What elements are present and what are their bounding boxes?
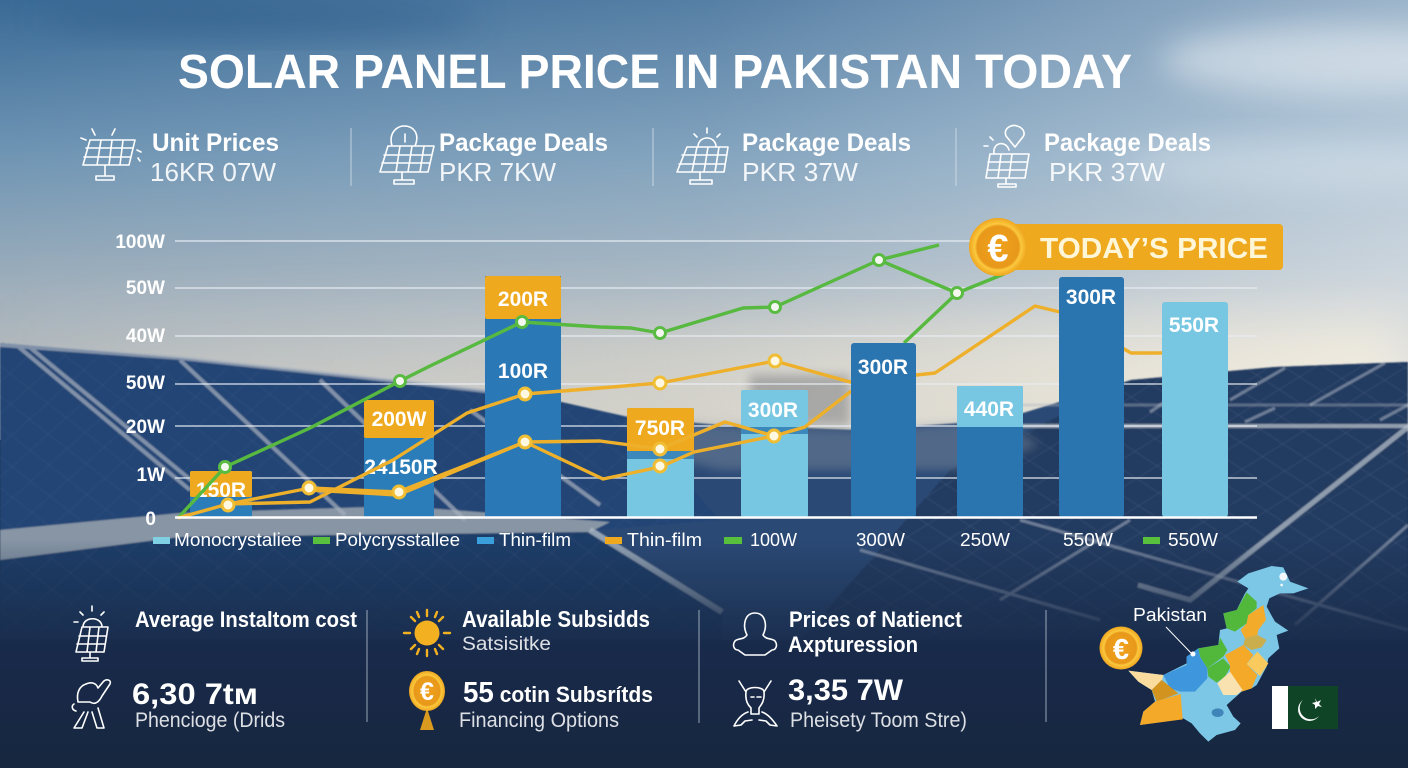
panel: national prices: Axpturession <box>788 632 918 657</box>
stat: package deals 7KW: Package Deals <box>439 129 608 157</box>
bar: 300R tall: 300R <box>1066 286 1116 309</box>
bar: 300R light <box>741 390 808 517</box>
panel: national prices: Prices of Natienct <box>789 607 963 632</box>
legend: Thin-film <box>499 530 571 550</box>
bar: 550R <box>1162 302 1228 517</box>
icon: euro coin: € <box>1113 634 1129 666</box>
bar: 300R tall <box>1059 277 1124 517</box>
bar: 150R <box>190 471 252 517</box>
line: amber series <box>178 306 1165 518</box>
y axis labels: 50W <box>126 373 165 394</box>
legend <box>153 530 1218 550</box>
icon: wrench worker <box>72 680 110 728</box>
icon: solar panel with pin <box>984 125 1029 187</box>
y axis labels: 40W <box>126 326 165 347</box>
bar: 750R: 750R <box>635 417 685 440</box>
stat: unit prices: 16KR 07W <box>150 157 276 187</box>
bar: 440R <box>957 386 1023 517</box>
legend: 100W <box>750 530 797 550</box>
icon: sun <box>404 610 450 656</box>
stat: package deals 7KW <box>380 126 608 187</box>
legend: 250W <box>960 530 1010 550</box>
bar: 200W <box>364 400 438 517</box>
legend: Monocrystaliee <box>174 530 302 550</box>
panel: subsidies: 55 cotin Subsrítds <box>463 677 653 709</box>
icon: solar panel with sun <box>677 128 728 184</box>
panel: subsidies: Satsisitke <box>462 634 551 655</box>
title: SOLAR PANEL PRICE IN PAKISTAN TODAY <box>178 46 1132 99</box>
bar: 200W: 24150R <box>364 456 438 479</box>
line markers <box>220 254 962 511</box>
panel: installation cost: Average Instaltom cost <box>135 607 358 632</box>
y axis labels: 20W <box>126 417 165 438</box>
bar: 200R / 100R: 100R <box>498 360 548 383</box>
stat: package deals 37W: PKR 37W <box>742 157 858 187</box>
icon: solar panel with sunrise <box>74 606 108 661</box>
stat: package deals 37W with location: PKR 37W <box>1049 157 1165 187</box>
panel: subsidies: Available Subsidds <box>462 606 650 632</box>
stat: package deals 7KW: PKR 7KW <box>439 157 556 187</box>
callout: today's price: € <box>987 228 1009 270</box>
icon: euro medal <box>409 671 445 730</box>
legend: Polycrysstallee <box>335 530 460 550</box>
bar: 300R dark <box>851 343 916 517</box>
bar: 200W: 200W <box>372 408 427 431</box>
icon: euro coin <box>1100 626 1142 670</box>
bar: 750R <box>627 408 694 517</box>
map label: Pakistan <box>1133 605 1207 656</box>
bar: 300R light: 300R <box>748 399 798 422</box>
icon: euro medal: € <box>420 678 434 706</box>
top stats row <box>81 125 1211 187</box>
icon: solar panel with dollar bubble <box>380 126 434 184</box>
legend: 550W <box>1063 530 1113 550</box>
legend: 300W <box>856 530 905 550</box>
y axis labels: 100W <box>115 232 165 253</box>
panel: installation cost <box>72 606 358 732</box>
callout: today's price <box>969 218 1283 276</box>
stat: unit prices <box>81 129 279 187</box>
bar: 440R: 440R <box>964 398 1014 421</box>
y axis labels: 50W <box>126 278 165 299</box>
bar: 200R / 100R <box>485 276 561 517</box>
panel: national prices: Pheisety Toom Stre) <box>790 709 967 732</box>
panel: installation cost: 6,30 7tм <box>132 678 258 711</box>
panel: installation cost: Phenciоge (Drids <box>135 709 285 732</box>
bar: 150R: 150R <box>196 479 246 502</box>
callout: today's price: TODAY’S PRICE <box>1040 233 1268 265</box>
panel: national prices <box>734 607 967 732</box>
icon: person bust <box>734 613 776 655</box>
stat: package deals 37W with location: Package Deals <box>1044 129 1211 157</box>
panel: national prices: 3,35 7W <box>788 674 904 707</box>
chart: price bars and lines <box>115 232 1257 530</box>
stat: unit prices: Unit Prices <box>152 129 279 157</box>
line: green series <box>178 245 1004 518</box>
legend: Thin-film <box>627 530 702 550</box>
stat: package deals 37W <box>677 128 911 187</box>
bar: 200R / 100R: 200R <box>498 288 548 311</box>
legend: 550W <box>1168 530 1218 550</box>
panel: subsidies: Financing Options <box>459 709 619 732</box>
stat: package deals 37W with location <box>984 125 1211 187</box>
icon: robot figure <box>734 681 777 726</box>
bar: 550R: 550R <box>1169 314 1219 337</box>
y axis labels: 1W <box>136 465 165 486</box>
bar: 300R dark: 300R <box>858 356 908 379</box>
map label: Pakistan: Pakistan <box>1133 605 1207 625</box>
panel: subsidies <box>404 606 653 732</box>
icon: Pakistan flag <box>1272 686 1338 729</box>
y axis labels: 0 <box>145 509 156 530</box>
map: Pakistan regions <box>1128 566 1308 742</box>
stat: package deals 37W: Package Deals <box>742 129 911 157</box>
icon: solar panel <box>81 129 141 180</box>
y axis labels <box>115 232 165 530</box>
